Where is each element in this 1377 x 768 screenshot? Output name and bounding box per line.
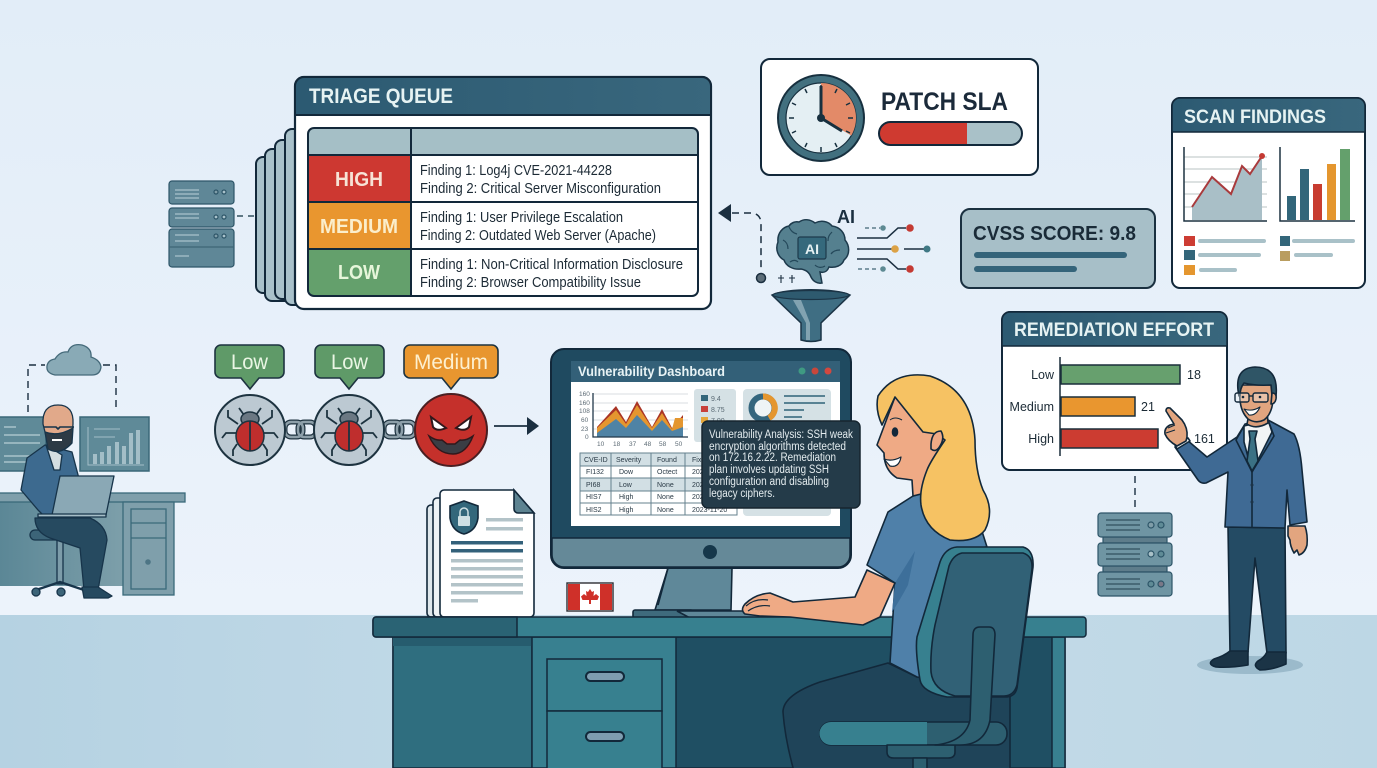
dashboard table: HIS2 — [586, 507, 602, 514]
chair back — [916, 547, 1033, 697]
dashboard area chart: 50 — [675, 441, 683, 448]
devil node — [415, 394, 487, 466]
connector: server to queue — [237, 215, 256, 217]
tooltip: vulnerability analysis: plan involves updating SSH — [709, 464, 829, 476]
dashboard table: High — [619, 494, 634, 501]
severity row: medium: Finding 2: Outdated Web Server (Apache) — [420, 227, 656, 244]
remediation header — [1002, 312, 1227, 346]
smile — [884, 457, 901, 466]
dashboard area chart: 160 — [579, 400, 590, 407]
scan legend — [1184, 236, 1355, 275]
dashboard table: High — [619, 507, 634, 514]
dashboard area chart: 10 — [597, 441, 605, 448]
icon: shield lock — [450, 501, 478, 534]
panel: vulnerability chain — [215, 345, 498, 466]
trousers — [783, 663, 1010, 768]
ear — [931, 431, 943, 450]
dashboard table: 2023-11-20 — [692, 507, 727, 514]
queue title: TRIAGE QUEUE — [309, 85, 453, 108]
seated woman and chair — [742, 375, 1033, 768]
dashboard table: Low — [619, 482, 633, 489]
area line chart — [1184, 147, 1267, 221]
severity tag: low — [315, 345, 384, 389]
icon: clock — [778, 75, 864, 161]
panel: scan findings — [1172, 98, 1365, 288]
dashboard table: Octect — [657, 469, 677, 476]
AI label: AI — [837, 207, 855, 227]
glasses — [1235, 393, 1268, 402]
dashboard table: PI68 — [586, 482, 601, 489]
main desk — [373, 617, 1086, 768]
tooltip: vulnerability analysis: encryption algorithms detected — [709, 441, 846, 453]
monitor body — [551, 349, 851, 568]
remediation title: REMEDIATION EFFORT — [1014, 320, 1214, 341]
icon: AI brain: AI — [805, 241, 819, 257]
dashboard legend — [694, 389, 736, 442]
dashboard area chart: 18 — [613, 441, 621, 448]
neck and face — [877, 397, 945, 496]
severity tag: low: Low — [231, 351, 269, 374]
CVSS value: CVSS SCORE: 9.8 — [973, 223, 1136, 245]
stacked queue pages — [256, 129, 315, 305]
tooltip: vulnerability analysis: configuration and disabling — [709, 476, 829, 488]
dashboard table: CVE-ID — [584, 457, 608, 464]
severity tag: medium — [404, 345, 498, 389]
suit jacket — [1175, 420, 1307, 528]
dashboard legend: 9.4 — [711, 396, 721, 403]
dashboard header — [571, 361, 840, 382]
dashboard table: Severity — [616, 457, 642, 464]
dashboard table: Fixed — [692, 457, 709, 464]
dashboard area chart: 23 — [581, 426, 589, 433]
panel: remediation effort — [1002, 312, 1227, 470]
dashboard legend: 7.00 — [711, 418, 725, 425]
severity row: low: LOW — [338, 262, 380, 284]
dashboard area chart: 60 — [581, 417, 589, 424]
monitor — [551, 349, 851, 568]
cloud connection — [28, 345, 116, 412]
shirt and tie — [1244, 420, 1272, 472]
panel: triage queue — [256, 77, 711, 309]
tooltip: vulnerability analysis — [702, 421, 860, 508]
smile — [1244, 407, 1260, 415]
horizontal bar chart: 21 — [1141, 400, 1155, 414]
horizontal bar chart: Low — [1031, 368, 1055, 382]
office chair — [30, 530, 84, 596]
dashboard area chart — [579, 391, 688, 448]
queue header — [295, 77, 711, 115]
scan header — [1172, 98, 1365, 132]
left server rack — [169, 181, 234, 267]
severity row: high: Finding 1: Log4j CVE-2021-44228 — [420, 162, 612, 179]
monitor stand — [633, 568, 773, 618]
tooltip: vulnerability analysis: Vulnerability Analysis: SSH weak — [709, 429, 853, 441]
dashboard table: None — [657, 482, 674, 489]
SLA title: PATCH SLA — [881, 88, 1008, 116]
head — [43, 405, 73, 445]
Canadian flag — [567, 583, 613, 611]
horizontal bar chart — [1010, 357, 1215, 456]
dashboard table — [580, 453, 737, 515]
presenter figure — [1165, 367, 1307, 674]
dashboard table: 2023 — [692, 494, 708, 501]
bar chart — [1280, 147, 1355, 221]
severity row: high: Finding 2: Critical Server Misconfiguration — [420, 180, 661, 197]
scan title: SCAN FINDINGS — [1184, 107, 1326, 128]
horizontal bar chart: 161 — [1194, 432, 1215, 446]
workstation desk — [0, 493, 185, 595]
screen — [571, 361, 840, 526]
shoes — [1210, 651, 1286, 670]
dashboard table: 2023 — [692, 469, 708, 476]
trousers — [1228, 527, 1286, 653]
severity row: low: Finding 2: Browser Compatibility Issue — [420, 274, 641, 291]
floor — [0, 615, 1377, 768]
queue card — [295, 77, 711, 309]
chair arm post — [935, 627, 995, 745]
desk top — [373, 617, 1086, 637]
eye — [892, 428, 898, 436]
SLA progress bar — [879, 122, 1022, 145]
severity tag: low — [215, 345, 284, 389]
tooltip: vulnerability analysis: legacy ciphers. — [709, 488, 775, 500]
severity row: high — [309, 155, 661, 202]
right server rack — [1098, 476, 1172, 596]
shoes — [82, 587, 112, 598]
severity row: medium — [309, 202, 656, 249]
document text lines — [451, 518, 523, 602]
dashboard table: Found — [657, 457, 677, 464]
severity row: low: Finding 1: Non-Critical Information Disclosure — [420, 256, 683, 273]
bug node 1 — [215, 395, 285, 465]
severity tag: medium: Medium — [414, 351, 488, 374]
icon: cloud — [47, 345, 101, 375]
drawers — [547, 659, 662, 768]
dashboard area chart: 48 — [644, 441, 652, 448]
dashboard area chart: 58 — [659, 441, 667, 448]
severity row: high: HIGH — [335, 169, 383, 191]
shirt — [867, 490, 987, 690]
dashboard area chart: 0 — [585, 434, 589, 441]
arm and hand — [742, 570, 895, 625]
dashboard table: HIS7 — [586, 494, 602, 501]
desk body — [393, 637, 1065, 768]
horizontal bar chart: Medium — [1010, 400, 1054, 414]
chair seat — [820, 722, 1007, 745]
tooltip: vulnerability analysis: on 172.16.2.22. Remediation — [709, 452, 836, 464]
table header row — [308, 128, 698, 155]
pointing hand — [1165, 408, 1187, 446]
icon: funnel — [772, 290, 850, 342]
laptop — [52, 476, 114, 515]
dashboard donut card — [743, 389, 831, 516]
dashboard area chart: 108 — [579, 408, 590, 415]
hair — [877, 375, 990, 541]
severity row: low — [309, 249, 683, 296]
workstation monitors — [0, 417, 149, 471]
severity row: medium: Finding 1: User Privilege Escalation — [420, 209, 623, 226]
dashboard table: None — [657, 494, 674, 501]
dashboard legend: 8.75 — [711, 407, 725, 414]
bug node 2 — [314, 395, 384, 465]
analyst at laptop — [21, 405, 114, 598]
free hand — [1288, 526, 1307, 555]
dashboard area chart: 37 — [629, 441, 637, 448]
shirt cuff — [1175, 438, 1190, 449]
dashboard table: 2023 — [692, 482, 708, 489]
panel: patch SLA — [761, 59, 1038, 175]
horizontal bar chart: 18 — [1187, 368, 1201, 382]
head — [1247, 410, 1268, 427]
dashboard table: None — [657, 507, 674, 514]
panel: CVSS score — [961, 209, 1155, 288]
dashboard header: Vulnerability Dashboard — [578, 364, 725, 379]
severity tag: low: Low — [331, 351, 369, 374]
shirt — [46, 445, 62, 470]
arrow: AI to triage queue — [718, 204, 795, 283]
chain links — [285, 422, 415, 437]
dashboard table: FI132 — [586, 469, 604, 476]
jacket — [21, 445, 82, 522]
icon: AI brain — [777, 220, 849, 283]
arrow: chain to dashboard — [494, 417, 539, 435]
trousers — [35, 518, 107, 590]
dashboard table: Dow — [619, 469, 634, 476]
CVSS bars — [974, 252, 1127, 272]
floor shadow — [1197, 656, 1303, 674]
severity row: medium: MEDIUM — [320, 216, 398, 238]
table grid — [308, 128, 698, 296]
horizontal bar chart: High — [1028, 432, 1054, 446]
monitor chin — [552, 538, 850, 567]
AI circuit outputs — [857, 224, 930, 273]
dashboard area chart: 160 — [579, 391, 590, 398]
document with shield — [427, 490, 534, 617]
keyboard and base — [633, 610, 693, 618]
